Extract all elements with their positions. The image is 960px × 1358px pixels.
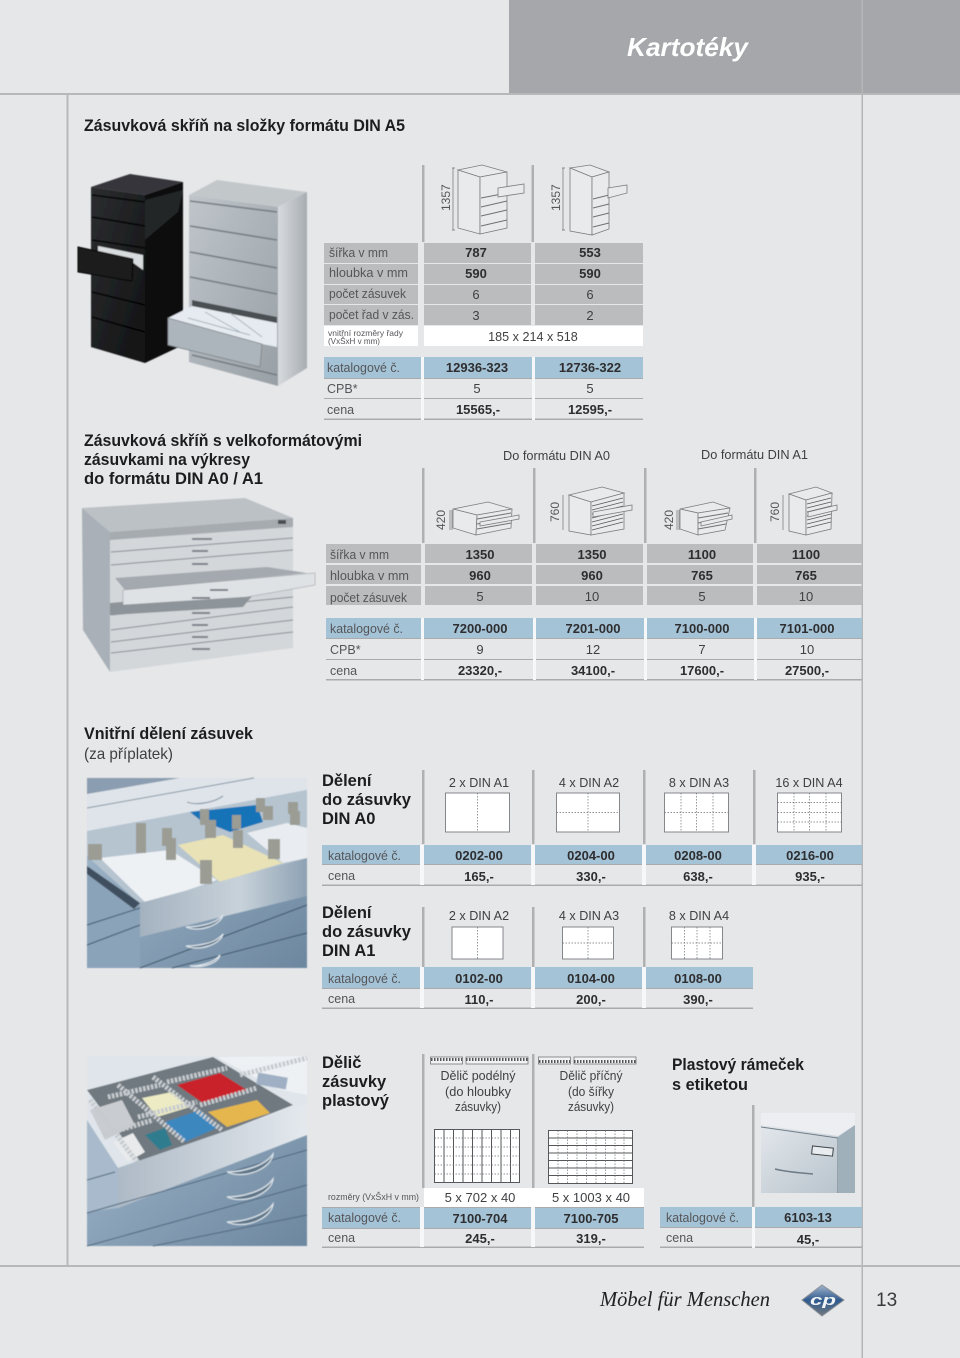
table: A5 prices: 12736-322 <box>559 360 621 375</box>
table: A5 specifications: 6 <box>586 287 594 302</box>
dimension label 420: 420 <box>434 510 448 530</box>
table: plan chest prices: 17600,- <box>680 663 724 678</box>
label: plastic dividers: plastový <box>322 1092 390 1110</box>
diagrams: A0 divisions: 2 x DIN A1 <box>449 776 509 790</box>
label: division A0: DIN A0 <box>322 810 375 828</box>
table: plastic dividers: 245,- <box>465 1231 495 1246</box>
plastic divider column 2: Dělič příčný <box>560 1068 623 1083</box>
plastic divider column 1 <box>422 1054 528 1188</box>
slogan: Möbel für Menschen <box>599 1287 770 1311</box>
table: plan chest specifications: 960 <box>469 568 491 583</box>
table: plan chest specifications: 1100 <box>792 547 820 562</box>
diagram: 2 x A1 <box>446 793 510 832</box>
table: A5 prices: 15565,- <box>456 402 500 417</box>
table: plan chest prices: CPB* <box>330 643 361 657</box>
diagrams: A1 divisions: 4 x DIN A3 <box>559 909 619 923</box>
heading: large format drawers <box>84 432 362 488</box>
heading: inner drawer divisions: (za příplatek) <box>84 746 173 763</box>
comb strips crosswise <box>538 1057 636 1064</box>
table: A5 specifications: hloubka v mm <box>329 266 408 280</box>
table: A5 specifications: 6 <box>472 287 480 302</box>
grid crosswise <box>548 1130 632 1184</box>
heading: large format drawers: do formátu DIN A0 / A1 <box>84 470 263 488</box>
table: plan chest prices: 7101-000 <box>780 621 834 636</box>
table: A5 prices: 12595,- <box>568 402 612 417</box>
dimension label 1357 wide: 1357 <box>439 184 453 211</box>
table: plan chest prices: 27500,- <box>785 663 829 678</box>
table: A5 specifications: (VxŠxH v mm) <box>328 336 380 346</box>
photo: drawer with dividers <box>87 778 307 968</box>
table: A0 division prices: cena <box>328 869 355 883</box>
table: plan chest prices: 12 <box>586 642 600 657</box>
diagram: 8 x A3 <box>664 793 728 832</box>
heading: large format drawers: zásuvkami na výkresy <box>84 451 251 469</box>
table: plan chest prices: 10 <box>800 642 814 657</box>
table: A0 division prices: 0208-00 <box>674 848 722 863</box>
label: division A0: Dělení <box>322 772 373 790</box>
heading: inner drawer divisions <box>84 725 254 763</box>
table: plastic dividers: 7100-705 <box>564 1211 618 1226</box>
table: plastic dividers: 7100-704 <box>453 1211 508 1226</box>
table: plan chest specifications <box>326 544 862 605</box>
diagrams: A1 divisions: 2 x DIN A2 <box>449 909 509 923</box>
table: plan chest specifications: 765 <box>795 568 817 583</box>
table: A0 division prices: 165,- <box>464 869 494 884</box>
heading: plastic label frame <box>672 1056 805 1094</box>
heading: plastic label frame: s etiketou <box>672 1076 748 1094</box>
table: plan chest prices: 23320,- <box>458 663 502 678</box>
table: A5 specifications: 553 <box>579 245 601 260</box>
grid lengthwise <box>434 1130 520 1182</box>
table: plan chest prices: 7 <box>698 642 706 657</box>
table: A1 division prices: 110,- <box>465 992 493 1007</box>
table: A0 division prices: 935,- <box>795 869 825 884</box>
label: division A1: DIN A1 <box>322 942 375 960</box>
table: A5 prices: 12936-323 <box>446 360 508 375</box>
table: A5 specifications: 185 x 214 x 518 <box>488 330 578 344</box>
page number: 13 <box>876 1290 897 1311</box>
table: A1 division prices: 390,- <box>683 992 713 1007</box>
title: Kartotéky <box>627 32 750 62</box>
table: plan chest specifications: 1100 <box>688 547 716 562</box>
label: plastic dividers <box>322 1054 390 1110</box>
table: A1 division prices: 0102-00 <box>455 971 503 986</box>
diagrams: A1 divisions <box>422 907 729 967</box>
table: A5 specifications: 787 <box>465 245 487 260</box>
plastic divider column 1: zásuvky) <box>455 1099 501 1114</box>
table: plan chest specifications: počet zásuvek <box>330 591 408 605</box>
dimension label 760: 760 <box>768 502 782 522</box>
caption: DIN A0: Do formátu DIN A0 <box>503 448 610 463</box>
label: plastic dividers: zásuvky <box>322 1073 387 1091</box>
plastic divider column 2: zásuvky) <box>568 1099 614 1114</box>
table: A5 prices: 5 <box>473 381 481 396</box>
table: plan chest specifications: 10 <box>799 589 813 604</box>
photo: label frame on cabinet <box>752 1105 855 1207</box>
table: plan chest specifications: 765 <box>691 568 713 583</box>
logo: cp <box>802 1285 844 1316</box>
table: A0 division prices: 0204-00 <box>567 848 615 863</box>
diagrams: A0 divisions: 4 x DIN A2 <box>559 776 619 790</box>
table: plan chest specifications: 1350 <box>578 547 606 562</box>
photo: plastic drawer dividers <box>87 1056 307 1246</box>
table: plan chest specifications: 1350 <box>466 547 494 562</box>
diagram: 16 x A4 <box>778 793 842 832</box>
plastic divider column 1: Dělič podélný <box>440 1068 516 1083</box>
heading: inner drawer divisions: Vnitřní dělení zásuvek <box>84 725 254 743</box>
photo: black and silver A5 cabinets <box>78 174 307 386</box>
diagrams: A0 divisions: 8 x DIN A3 <box>669 776 729 790</box>
table: plastic dividers <box>322 1188 644 1248</box>
table: A5 specifications: počet řad v zás. <box>329 308 414 322</box>
table: A5 specifications: 3 <box>472 308 480 323</box>
photo: plan chest <box>82 498 315 672</box>
table: plan chest prices: katalogové č. <box>330 622 403 636</box>
logo: cp: cp <box>810 1292 836 1309</box>
plastic divider column 2 <box>532 1054 636 1188</box>
label: division A1: Dělení <box>322 904 373 922</box>
table: plastic dividers: 319,- <box>576 1231 606 1246</box>
label: division A0 <box>322 772 412 828</box>
comb strips lengthwise <box>430 1057 528 1064</box>
table: plan chest prices: 9 <box>476 642 484 657</box>
table: plastic dividers: 5 x 702 x 40 <box>445 1190 515 1205</box>
drawing A0 five drawers <box>450 502 519 535</box>
table: plastic dividers: 5 x 1003 x 40 <box>552 1190 630 1205</box>
table: plan chest prices: 7100-000 <box>675 621 729 636</box>
cabinet drawing wide <box>452 165 524 234</box>
table: A5 prices: CPB* <box>327 382 358 396</box>
table: label frame <box>660 1207 862 1248</box>
table: A1 division prices: 200,- <box>576 992 606 1007</box>
drawing A1 ten drawers <box>783 487 837 535</box>
table: A5 specifications: 2 <box>586 308 594 323</box>
table: A0 division prices: 0216-00 <box>786 848 834 863</box>
dimension drawings: plan chests <box>422 468 837 543</box>
drawing A1 five drawers <box>677 502 732 535</box>
table: label frame: cena <box>666 1231 693 1245</box>
table: A5 specifications: vnitřní rozměry řady <box>328 328 404 338</box>
plastic divider column 1: (do hloubky <box>445 1084 511 1099</box>
label: division A1 <box>322 904 412 960</box>
label: division A0: do zásuvky <box>322 791 412 809</box>
diagrams: A1 divisions: 8 x DIN A4 <box>669 909 729 923</box>
table: A1 division prices: 0104-00 <box>567 971 615 986</box>
drawing A0 ten drawers <box>563 487 632 535</box>
table: plan chest specifications: hloubka v mm <box>330 569 409 583</box>
table: A5 prices: 5 <box>586 381 594 396</box>
table: A5 specifications: 590 <box>579 266 601 281</box>
cabinet drawing narrow <box>562 165 627 235</box>
diagram: 4 x A3 <box>562 927 614 959</box>
table: plastic dividers: katalogové č. <box>328 1211 401 1225</box>
diagram: 4 x A2 <box>556 793 620 832</box>
table: A1 division prices: 0108-00 <box>674 971 722 986</box>
table: A0 division prices: 0202-00 <box>455 848 503 863</box>
table: A0 division prices: 330,- <box>576 869 606 884</box>
table: A5 prices <box>324 357 643 420</box>
table: plan chest specifications: šířka v mm <box>330 548 389 562</box>
table: label frame: katalogové č. <box>666 1211 739 1225</box>
table: plan chest prices: 34100,- <box>571 663 615 678</box>
table: A5 prices: katalogové č. <box>327 361 400 375</box>
caption: DIN A1: Do formátu DIN A1 <box>701 447 808 462</box>
table: plan chest prices <box>326 618 862 680</box>
table: A0 division prices <box>322 845 862 886</box>
table: A5 specifications: šířka v mm <box>329 246 388 260</box>
table: plan chest specifications: 960 <box>581 568 603 583</box>
table: plastic dividers: rozměry (VxŠxH v mm) <box>328 1192 419 1203</box>
label: plastic dividers: Dělič <box>322 1054 361 1072</box>
label: division A1: do zásuvky <box>322 923 412 941</box>
dimension label 760: 760 <box>548 502 562 522</box>
table: A0 division prices: 638,- <box>683 869 713 884</box>
table: A5 specifications: 590 <box>465 266 487 281</box>
table: plan chest specifications: 5 <box>698 589 706 604</box>
heading: plastic label frame: Plastový rámeček <box>672 1056 805 1074</box>
table: A5 specifications <box>324 243 643 346</box>
table: label frame: 45,- <box>797 1232 819 1247</box>
table: A0 division prices: katalogové č. <box>328 849 401 863</box>
heading: A5 cabinets: Zásuvková skříň na složky formátu DIN A5 <box>84 117 405 135</box>
table: plan chest specifications: 5 <box>476 589 484 604</box>
dimension label 1357 narrow: 1357 <box>549 184 563 211</box>
table: A5 prices: cena <box>327 403 354 417</box>
table: plan chest specifications: 10 <box>585 589 599 604</box>
dimension drawings: A5 cabinets <box>422 165 627 242</box>
table: A1 division prices: cena <box>328 992 355 1006</box>
diagrams: A0 divisions <box>422 770 843 844</box>
table: plan chest prices: cena <box>330 664 357 678</box>
table: A5 specifications: počet zásuvek <box>329 287 407 301</box>
dimension label 420: 420 <box>662 510 676 530</box>
heading: large format drawers: Zásuvková skříň s velkoformátovými <box>84 432 362 450</box>
table: plastic dividers: cena <box>328 1231 355 1245</box>
table: label frame: 6103-13 <box>784 1210 832 1225</box>
table: plan chest prices: 7200-000 <box>453 621 507 636</box>
diagram: 8 x A4 <box>672 927 722 959</box>
table: A1 division prices <box>322 967 753 1009</box>
plastic divider column 2: (do šířky <box>568 1084 614 1099</box>
table: plan chest prices: 7201-000 <box>566 621 620 636</box>
diagram: 2 x A2 <box>452 927 503 959</box>
diagrams: A0 divisions: 16 x DIN A4 <box>775 776 843 790</box>
table: A1 division prices: katalogové č. <box>328 972 401 986</box>
